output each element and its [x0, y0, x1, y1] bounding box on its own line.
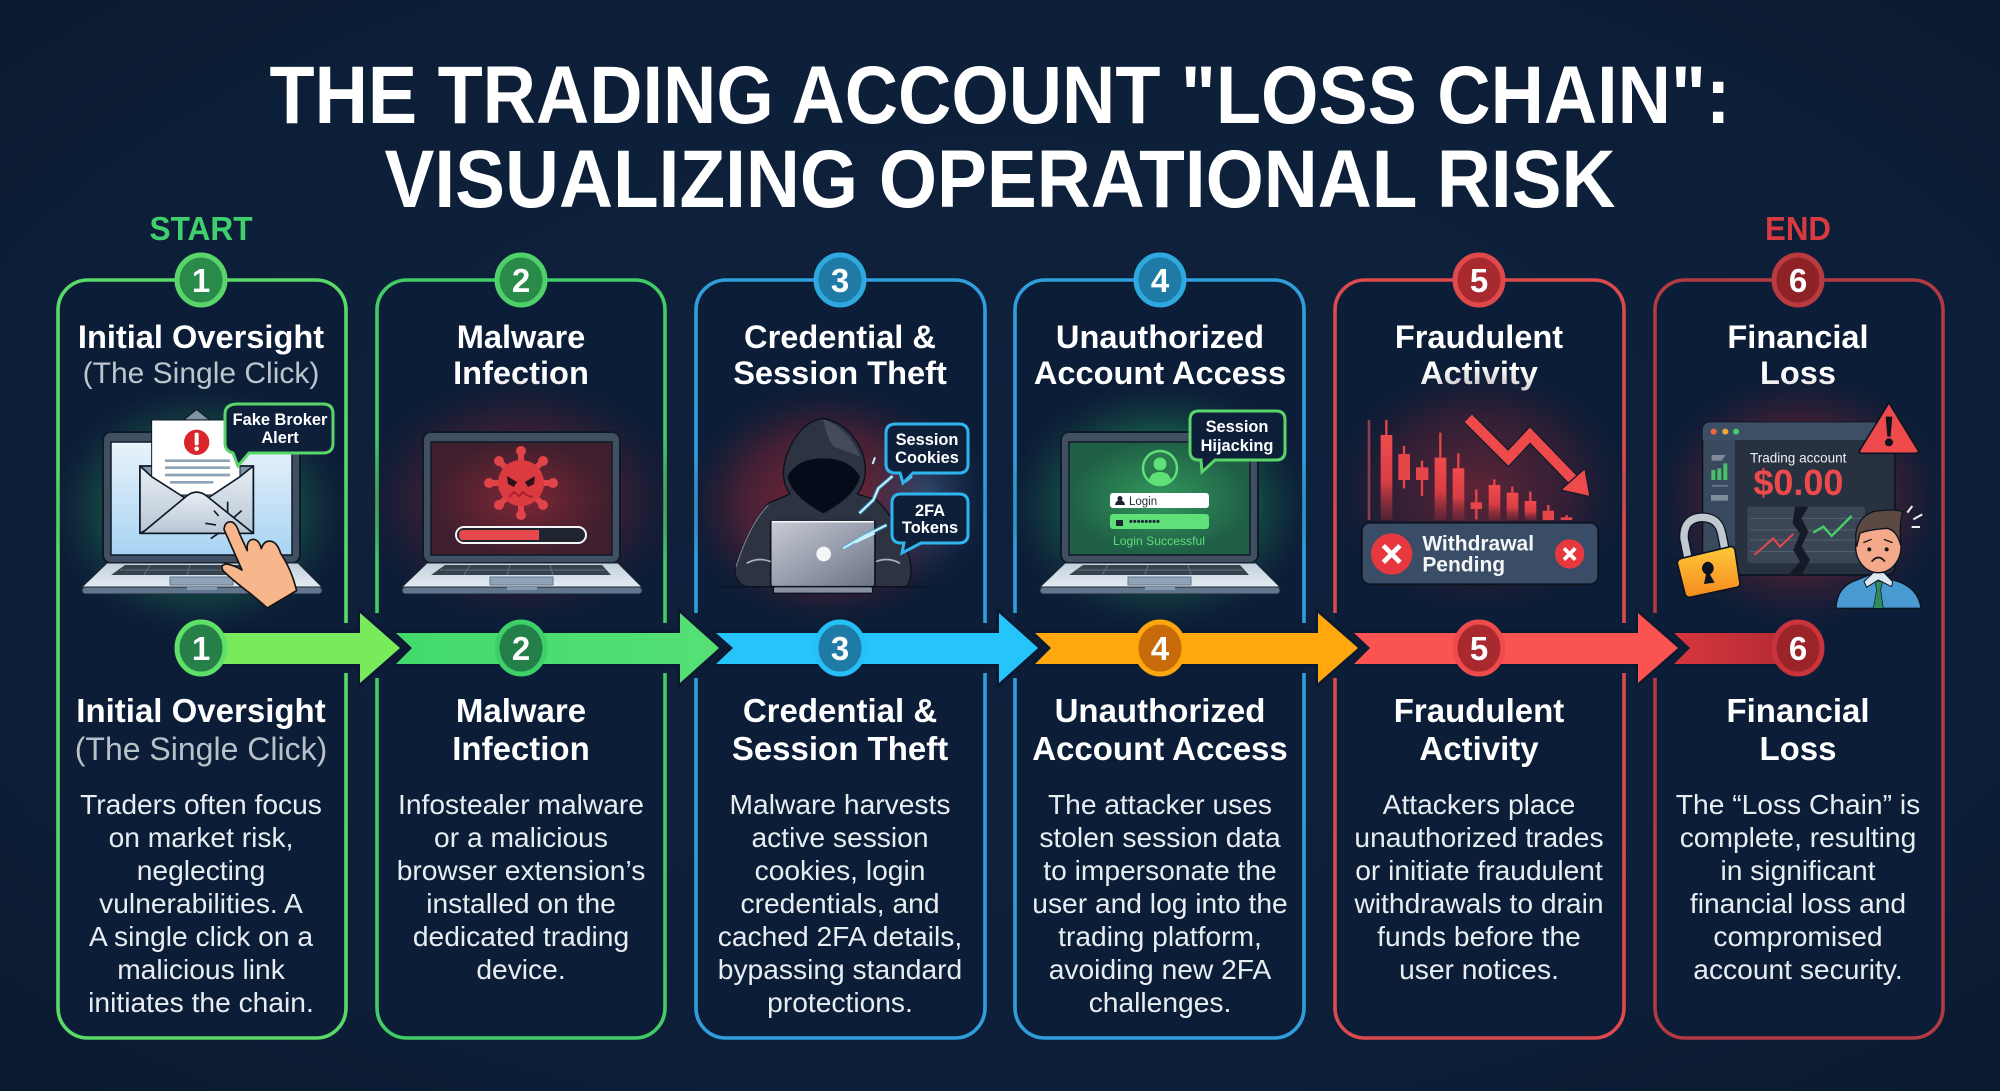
heading: Infection: [453, 354, 589, 391]
description: credentials, and: [740, 887, 940, 919]
description: unauthorized trades: [1354, 821, 1604, 853]
callout: fake broker alert: Fake Broker: [233, 411, 328, 429]
description: [1032, 788, 1288, 1018]
arrow step 3: [716, 613, 1038, 683]
title: THE TRADING ACCOUNT "LOSS CHAIN":: [270, 50, 1730, 141]
heading: Session Theft: [733, 354, 947, 391]
lower heading: [1032, 692, 1288, 767]
callout: session cookies: Session: [896, 431, 958, 449]
lower heading: Initial Oversight: [76, 692, 326, 729]
description: initiates the chain.: [88, 986, 314, 1018]
lower heading: Infection: [452, 730, 590, 767]
description: cached 2FA details,: [718, 920, 962, 952]
description: avoiding new 2FA: [1049, 953, 1271, 985]
heading: (The Single Click): [83, 357, 319, 390]
heading: [453, 318, 589, 391]
arrow step 2: [396, 613, 719, 683]
description: or initiate fraudulent: [1355, 854, 1603, 886]
lower heading: Financial: [1726, 692, 1870, 729]
description: financial loss and: [1690, 887, 1906, 919]
description: device.: [476, 953, 566, 985]
callout: fake broker alert: Alert: [261, 429, 299, 447]
heading: Malware: [457, 318, 585, 355]
heading: Account Access: [1034, 354, 1286, 391]
callout: session hijacking: Session: [1206, 418, 1268, 436]
lower heading: [75, 692, 327, 767]
heading: Activity: [1420, 354, 1538, 391]
heading: Unauthorized: [1056, 318, 1264, 355]
description: withdrawals to drain: [1353, 887, 1604, 919]
step badge 3: 3: [831, 262, 849, 299]
description: [1353, 788, 1604, 985]
lower heading: Account Access: [1032, 730, 1288, 767]
callout: fake broker alert: [225, 404, 333, 466]
description: [718, 788, 962, 1018]
description: Malware harvests: [730, 788, 950, 820]
icon: down arrow: [1468, 418, 1590, 497]
lower heading: Loss: [1759, 730, 1837, 767]
login form: ••••••••: [1129, 516, 1160, 528]
description: to impersonate the: [1043, 854, 1277, 886]
callout: 2FA tokens: [892, 494, 968, 553]
lower heading: Session Theft: [732, 730, 948, 767]
lower heading: [1394, 692, 1564, 767]
step badge 4: [1136, 255, 1184, 305]
description: The “Loss Chain” is: [1676, 788, 1920, 820]
panel 2: malware infection: [356, 255, 686, 1038]
step badge 1: 1: [192, 262, 210, 299]
candlestick chart: [1368, 420, 1572, 520]
lower heading: [1726, 692, 1870, 767]
heading: Initial Oversight: [78, 318, 324, 355]
description: browser extension’s: [397, 854, 645, 886]
status bar: withdrawal pending: Withdrawal: [1422, 533, 1534, 556]
status bar: withdrawal pending: Pending: [1422, 554, 1505, 577]
description: The attacker uses: [1048, 788, 1272, 820]
heading: Loss: [1760, 354, 1836, 391]
heading: Credential &: [744, 318, 936, 355]
description: A single click on a: [89, 920, 313, 952]
description: user notices.: [1399, 953, 1559, 985]
panel 6: financial loss: [1652, 255, 1948, 1038]
heading: [78, 318, 324, 390]
heading: [733, 318, 947, 391]
panel 5: fraudulent activity: [1330, 255, 1630, 1038]
title: VISUALIZING OPERATIONAL RISK: [384, 134, 1616, 225]
description: account security.: [1693, 953, 1903, 985]
progress bar: [456, 527, 586, 543]
description: in significant: [1720, 854, 1876, 886]
description: trading platform,: [1058, 920, 1262, 952]
description: Infostealer malware: [398, 788, 644, 820]
login form: Login Successful: [1113, 534, 1205, 548]
arrow step 1: 1: [192, 630, 210, 667]
step badge 6: [1774, 255, 1822, 305]
trading window: [1703, 422, 1895, 575]
illustration: infected laptop: [356, 375, 686, 625]
description: bypassing standard: [718, 953, 962, 985]
description: user and log into the: [1032, 887, 1288, 919]
description: malicious link: [117, 953, 286, 985]
step badge 2: [497, 255, 545, 305]
description: Traders often focus: [80, 788, 322, 820]
illustration: laptop with phishing email and clicking hand: [50, 385, 350, 635]
lower heading: (The Single Click): [75, 731, 327, 767]
step badge 3: [816, 255, 864, 305]
lower heading: [732, 692, 948, 767]
description: protections.: [767, 986, 913, 1018]
description: stolen session data: [1039, 821, 1281, 853]
heading: [1395, 318, 1563, 391]
lower heading: Fraudulent: [1394, 692, 1564, 729]
arrow step 1: [177, 613, 400, 683]
description: neglecting: [137, 854, 265, 886]
trading window: Trading account: [1750, 451, 1847, 466]
end label: END: [1765, 210, 1831, 247]
heading: Financial: [1727, 318, 1869, 355]
lower heading: Activity: [1419, 730, 1539, 767]
lower heading: Credential &: [743, 692, 937, 729]
icon: warning triangle: [1859, 403, 1918, 453]
lower heading: Unauthorized: [1055, 692, 1265, 729]
callout: 2FA tokens: Tokens: [902, 519, 958, 537]
panel 3: credential and session theft: [683, 255, 990, 1038]
heading: [1727, 318, 1869, 391]
step badge 5: [1455, 255, 1503, 305]
step badge 2: 2: [512, 262, 530, 299]
arrow step 4: [1035, 613, 1358, 683]
arrow step 4: 4: [1151, 630, 1170, 667]
lower heading: [452, 692, 590, 767]
description: [80, 788, 322, 1018]
icon: user: [1143, 451, 1177, 485]
description: cookies, login: [755, 854, 925, 886]
description: [397, 788, 645, 985]
description: Attackers place: [1383, 788, 1575, 820]
illustration: falling chart and withdrawal notice: [1330, 365, 1630, 615]
icon: padlock: [1677, 517, 1740, 597]
description: funds before the: [1377, 920, 1581, 952]
arrow step 2: 2: [512, 630, 530, 667]
callout: session hijacking: [1190, 411, 1285, 472]
callout: session cookies: [886, 424, 968, 483]
lower heading: Malware: [456, 692, 586, 729]
description: on market risk,: [109, 821, 293, 853]
description: active session: [751, 821, 929, 853]
panel 4: unauthorized account access: [1005, 255, 1315, 1038]
title: [270, 50, 1730, 225]
description: compromised: [1713, 920, 1883, 952]
illustration: zero balance dashboard: [1652, 372, 1948, 628]
panel 1: initial oversight: [50, 255, 350, 1038]
illustration: hooded hacker with laptop: [683, 385, 990, 625]
step badge 6: 6: [1789, 262, 1807, 299]
arrow step 6: [1674, 622, 1822, 674]
status bar: withdrawal pending: [1362, 523, 1598, 584]
icon: virus: [484, 446, 558, 520]
heading: [1034, 318, 1286, 391]
arrow step 3: 3: [831, 630, 849, 667]
arrow step 5: [1354, 613, 1678, 683]
callout: session hijacking: Hijacking: [1201, 437, 1273, 455]
description: challenges.: [1089, 986, 1231, 1018]
callout: 2FA tokens: 2FA: [915, 502, 945, 520]
trading window: $0.00: [1753, 462, 1843, 503]
description: or a malicious: [434, 821, 608, 853]
description: dedicated trading: [413, 920, 629, 952]
arrow step 6: 6: [1789, 630, 1807, 667]
callout: session cookies: Cookies: [895, 449, 959, 467]
step badge 1: [177, 255, 225, 305]
description: complete, resulting: [1680, 821, 1916, 853]
step badge 4: 4: [1151, 262, 1170, 299]
icon: worried trader: [1836, 506, 1922, 608]
login form: [1110, 493, 1209, 548]
description: [1676, 788, 1920, 985]
start label: START: [150, 210, 252, 247]
heading: Fraudulent: [1395, 318, 1563, 355]
arrow step 5: 5: [1470, 630, 1488, 667]
illustration: laptop with successful login: [1005, 380, 1315, 630]
login form: Login: [1129, 496, 1157, 508]
description: vulnerabilities. A: [99, 887, 303, 919]
description: installed on the: [426, 887, 616, 919]
step badge 5: 5: [1470, 262, 1488, 299]
